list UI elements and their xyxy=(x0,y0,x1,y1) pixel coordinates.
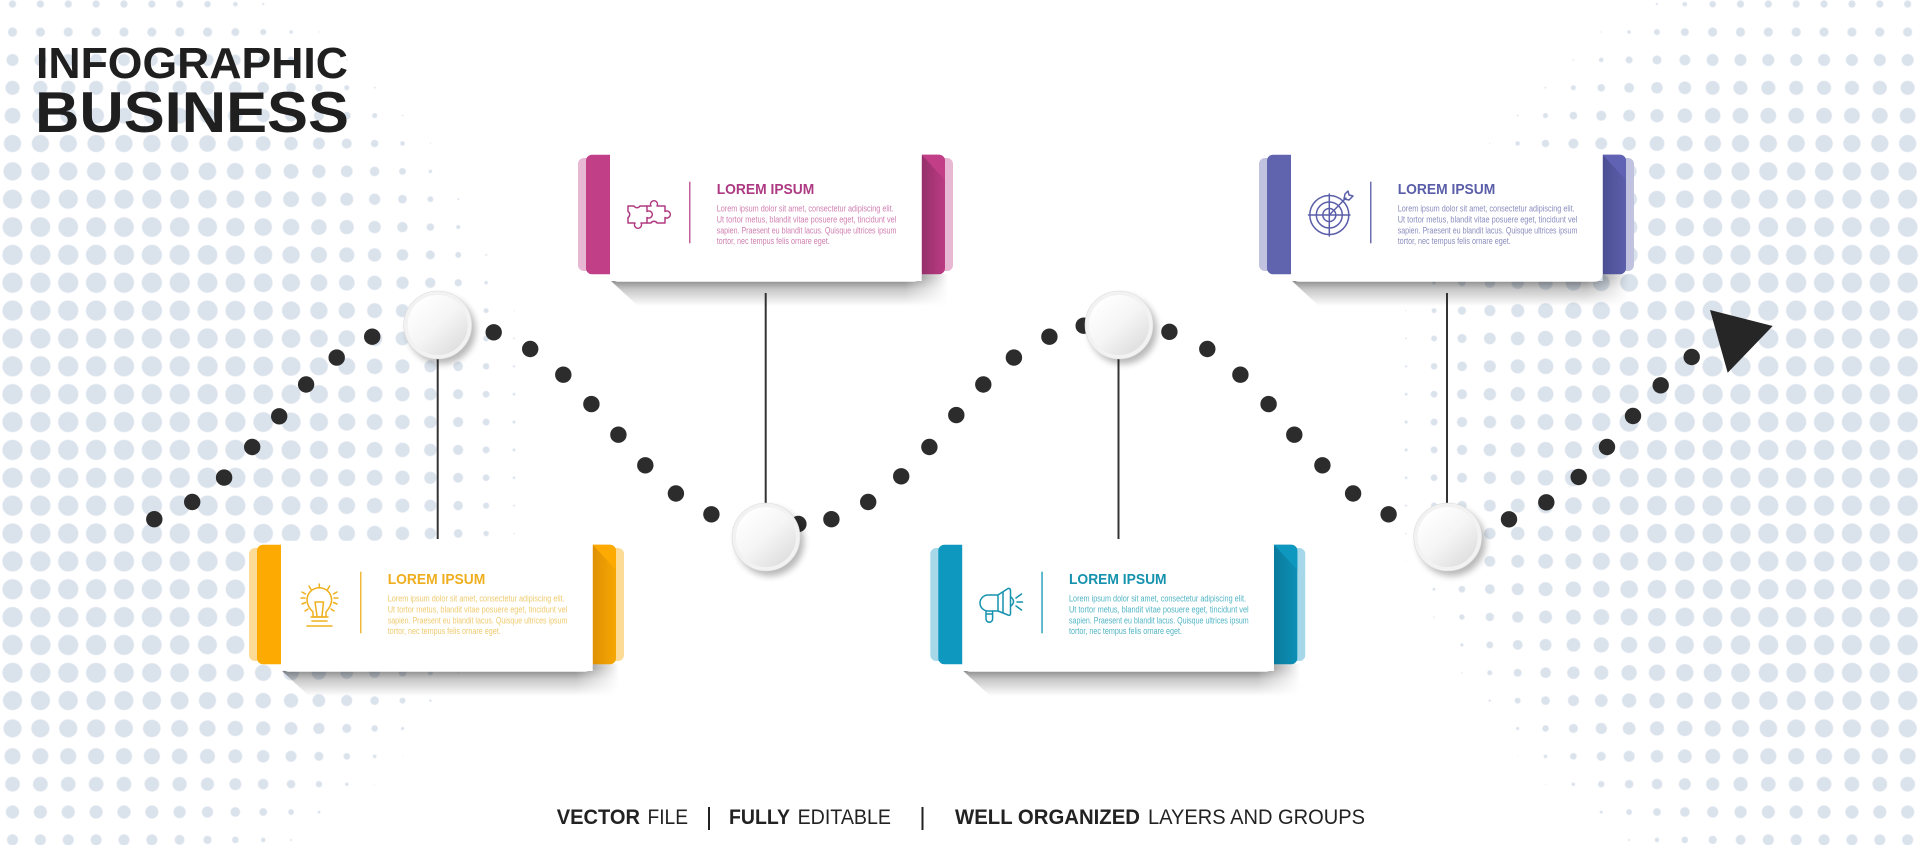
text block: magenta card: Ut tortor metus, blandit vitae posuere eget, tincidunt vel xyxy=(717,214,896,224)
text block: violet card: sapien. Praesent eu blandit lacus. Quisque ultrices ipsum xyxy=(1398,225,1577,235)
icon: megaphone xyxy=(980,588,1022,622)
panel: magenta puzzle card xyxy=(578,151,953,306)
text block: teal card: tortor, nec tempus felis ornare eget. xyxy=(1069,626,1182,636)
text block: teal card: Ut tortor metus, blandit vitae posuere eget, tincidunt vel xyxy=(1069,604,1249,614)
footer tagline xyxy=(557,805,1365,830)
text block: yellow card: sapien. Praesent eu blandit lacus. Quisque ultrices ipsum xyxy=(388,615,567,625)
heading: violet card: LOREM IPSUM xyxy=(1398,181,1495,198)
heading: yellow card: LOREM IPSUM xyxy=(388,571,485,588)
icon: light bulb xyxy=(301,584,338,626)
text block: violet card: tortor, nec tempus felis ornare eget. xyxy=(1398,236,1511,246)
arrow head xyxy=(1710,310,1773,373)
text block: violet card: Ut tortor metus, blandit vitae posuere eget, tincidunt vel xyxy=(1398,214,1577,224)
footer tagline: FILE xyxy=(648,805,688,829)
node circle 1 xyxy=(404,291,476,364)
text block: teal card: sapien. Praesent eu blandit lacus. Quisque ultrices ipsum xyxy=(1069,615,1249,625)
title: INFOGRAPHIC xyxy=(36,40,348,88)
text block: yellow card xyxy=(388,594,567,636)
text block: violet card: Lorem ipsum dolor sit amet, consectetur adipiscing elit. xyxy=(1398,204,1575,214)
text block: magenta card xyxy=(717,204,896,246)
text block: yellow card: Ut tortor metus, blandit vitae posuere eget, tincidunt vel xyxy=(388,604,567,614)
panel: teal megaphone card xyxy=(930,541,1305,696)
node circle 4 xyxy=(1414,503,1486,576)
title: BUSINESS xyxy=(35,81,349,145)
connector lines xyxy=(438,293,1447,539)
text block: teal card: Lorem ipsum dolor sit amet, consectetur adipiscing elit. xyxy=(1069,594,1246,604)
footer tagline: EDITABLE xyxy=(798,805,891,829)
footer tagline: WELL ORGANIZED xyxy=(955,805,1140,829)
node circle 2 xyxy=(732,503,804,576)
heading: teal card: LOREM IPSUM xyxy=(1069,571,1167,588)
text block: magenta card: Lorem ipsum dolor sit amet, consectetur adipiscing elit. xyxy=(717,204,894,214)
footer tagline: LAYERS AND GROUPS xyxy=(1148,805,1365,829)
icon: puzzle xyxy=(628,201,670,228)
text block: yellow card: tortor, nec tempus felis ornare eget. xyxy=(388,626,501,636)
panel: violet target card xyxy=(1259,151,1634,306)
footer tagline: FULLY xyxy=(729,805,790,829)
dotted path xyxy=(146,318,1700,532)
text block: teal card xyxy=(1069,594,1249,636)
text block: magenta card: tortor, nec tempus felis ornare eget. xyxy=(717,236,830,246)
icon: target xyxy=(1308,191,1353,236)
text block: magenta card: sapien. Praesent eu blandit lacus. Quisque ultrices ipsum xyxy=(717,225,896,235)
title xyxy=(35,40,349,145)
heading: magenta card: LOREM IPSUM xyxy=(717,181,814,198)
text block: yellow card: Lorem ipsum dolor sit amet, consectetur adipiscing elit. xyxy=(388,594,565,604)
footer tagline: VECTOR xyxy=(557,805,640,829)
node circle 3 xyxy=(1085,291,1157,364)
text block: violet card xyxy=(1398,204,1577,246)
panel: yellow bulb card xyxy=(249,541,624,696)
